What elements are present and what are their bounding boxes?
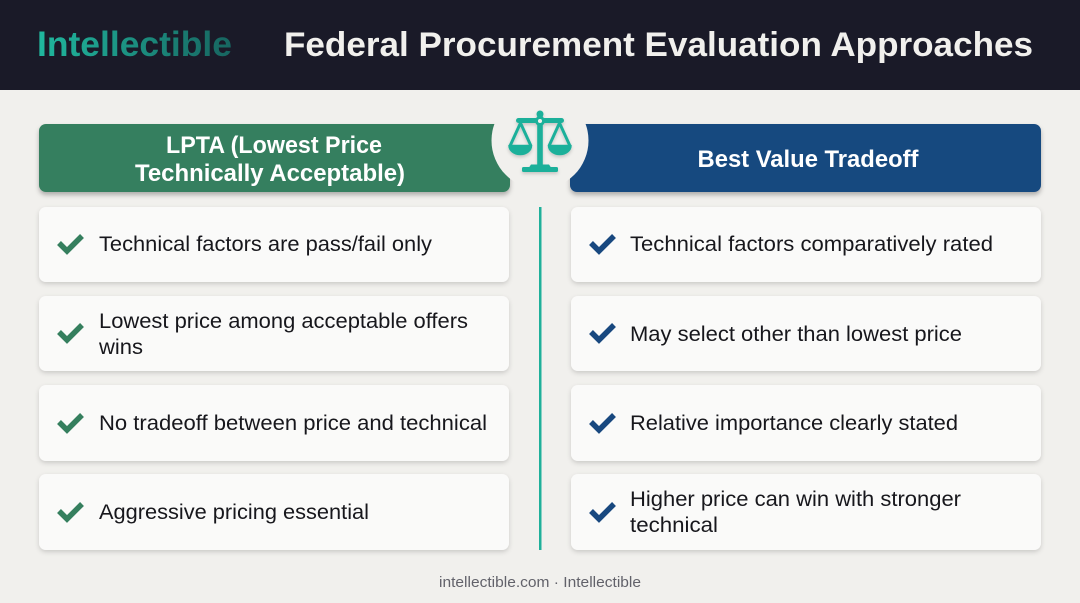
icon: balance scales	[509, 110, 571, 172]
card 4: Higher price can win with stronger	[630, 488, 961, 511]
panel heading: Best Value Tradeoff: Best Value Tradeoff	[698, 146, 919, 173]
card 4	[571, 474, 1041, 550]
logo: Intellectible	[37, 25, 232, 64]
card 2	[571, 296, 1041, 371]
card 3	[39, 385, 509, 461]
card 1: Technical factors are pass/fail only	[99, 233, 433, 256]
panel heading: LPTA	[39, 124, 510, 192]
center divider	[539, 207, 542, 550]
card 1	[571, 207, 1041, 282]
card 4: technical	[630, 514, 718, 537]
panel heading: LPTA: Technically Acceptable)	[135, 160, 405, 187]
footer: intellectible.com · Intellectible	[439, 574, 641, 591]
card 2: May select other than lowest price	[630, 323, 962, 346]
card 1	[39, 207, 509, 282]
card 3: Relative importance clearly stated	[630, 412, 958, 435]
card 2	[39, 296, 509, 371]
card 3: No tradeoff between price and technical	[99, 412, 487, 435]
card 2: wins	[98, 336, 143, 359]
title: Federal Procurement Evaluation Approaches	[284, 26, 1033, 64]
panel: LPTA items	[39, 207, 509, 550]
card 1: Technical factors comparatively rated	[630, 233, 993, 256]
card 4	[39, 474, 509, 550]
panel: Best Value items	[571, 207, 1041, 550]
panel heading: Best Value Tradeoff	[570, 124, 1041, 192]
panel heading: LPTA: LPTA (Lowest Price	[166, 132, 382, 159]
card 2: Lowest price among acceptable offers	[99, 310, 468, 333]
card 4: Aggressive pricing essential	[99, 501, 369, 524]
card 3	[571, 385, 1041, 461]
header bar	[0, 0, 1080, 90]
center badge circle	[492, 92, 588, 189]
